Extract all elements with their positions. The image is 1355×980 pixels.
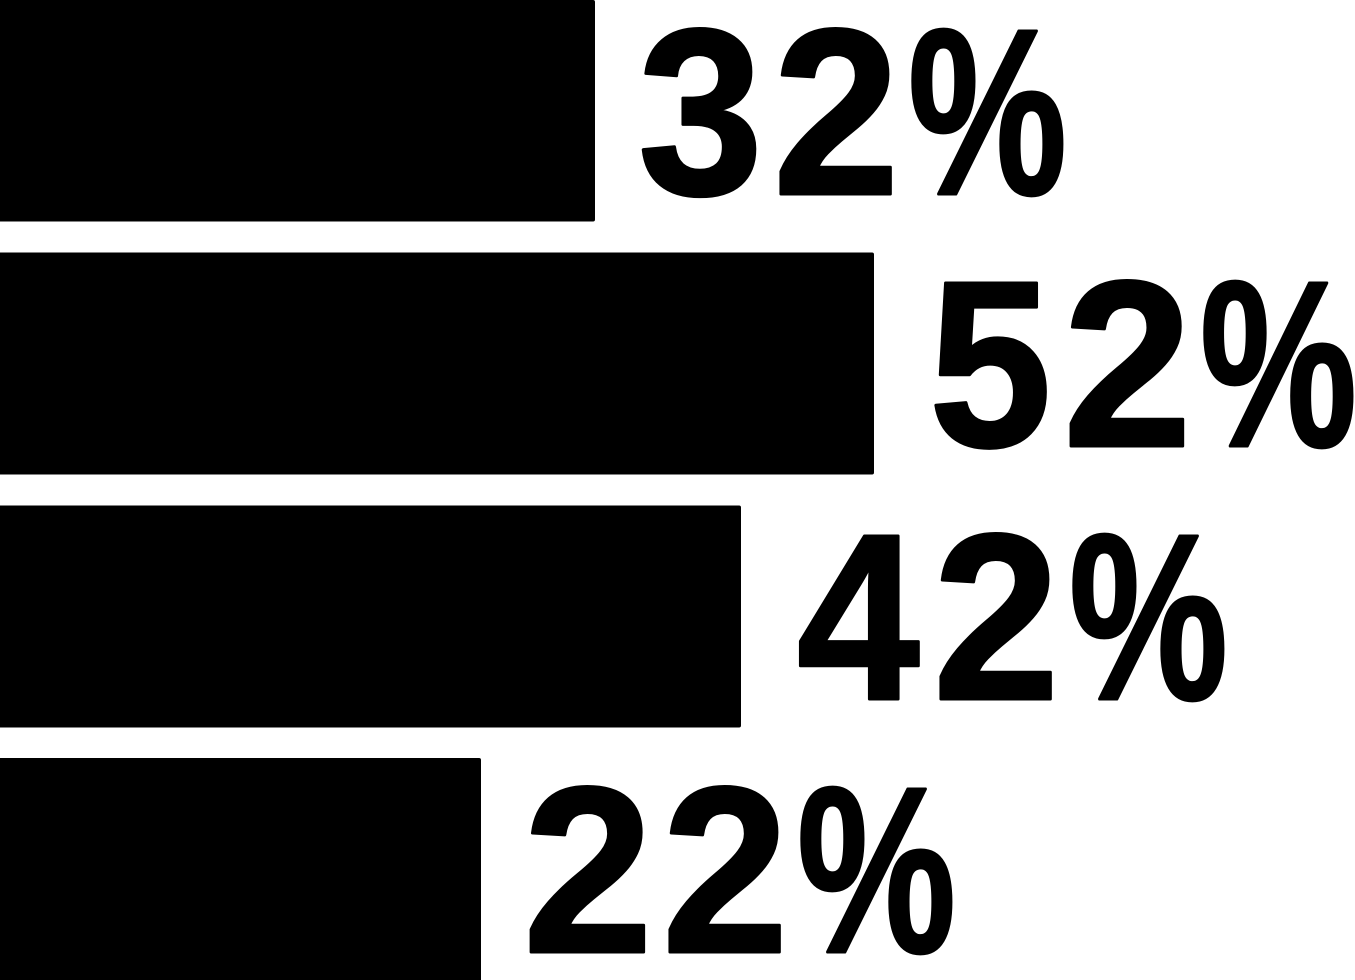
label: 52%: [929, 232, 1355, 497]
label: 42%: [797, 485, 1228, 750]
label: 52%: 5: [929, 232, 1052, 497]
label: 42%: %: [1069, 485, 1228, 750]
label: 32%: [638, 0, 1067, 245]
bar: 32%: [0, 0, 595, 222]
label: 42%: 2: [933, 485, 1060, 750]
label: 22%: [523, 738, 956, 980]
bar: 42%: [0, 506, 741, 728]
bar: 52%: [0, 252, 874, 474]
bar: 22%: [0, 758, 481, 980]
label: 52%: 2: [1063, 232, 1192, 497]
label: 42%: 4: [797, 485, 920, 750]
